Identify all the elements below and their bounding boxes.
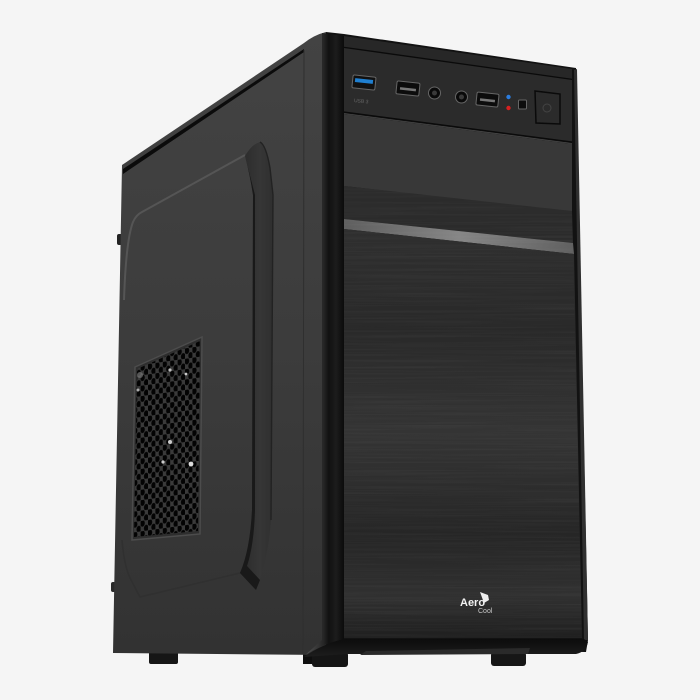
base lip — [304, 639, 588, 657]
ventilation grille — [132, 337, 202, 540]
screws on rear edge — [111, 234, 123, 592]
reset button — [518, 100, 526, 109]
USB 3.0 port: USB 3 — [354, 98, 369, 105]
panel: front frame — [304, 32, 588, 657]
headphone jack — [428, 87, 440, 99]
feet — [149, 650, 526, 667]
HDD LED — [506, 106, 511, 110]
front I/O ports — [352, 75, 560, 124]
power LED — [506, 95, 511, 99]
microphone jack — [456, 91, 468, 103]
top edge groove — [123, 49, 304, 174]
USB port left — [396, 81, 420, 96]
logo: AeroCool: Cool — [478, 608, 493, 615]
dark band — [344, 186, 573, 243]
USB 3.0 port — [352, 75, 376, 105]
right edge — [574, 69, 588, 640]
power button — [535, 91, 560, 124]
top trim — [344, 36, 572, 80]
port panel — [344, 48, 572, 142]
USB port right — [476, 92, 499, 107]
logo: AeroCool: Aero — [460, 597, 485, 609]
light strip — [344, 219, 574, 254]
embossed side panel outline — [124, 155, 245, 300]
panel: brushed front — [344, 36, 582, 638]
front side seam — [303, 50, 304, 654]
upper bay cover — [344, 114, 572, 212]
front corner pillar — [304, 33, 344, 656]
logo: AeroCool — [460, 592, 493, 615]
panel: side of case — [113, 32, 326, 655]
brushed mesh panel — [344, 229, 582, 638]
handle recess — [240, 142, 273, 590]
